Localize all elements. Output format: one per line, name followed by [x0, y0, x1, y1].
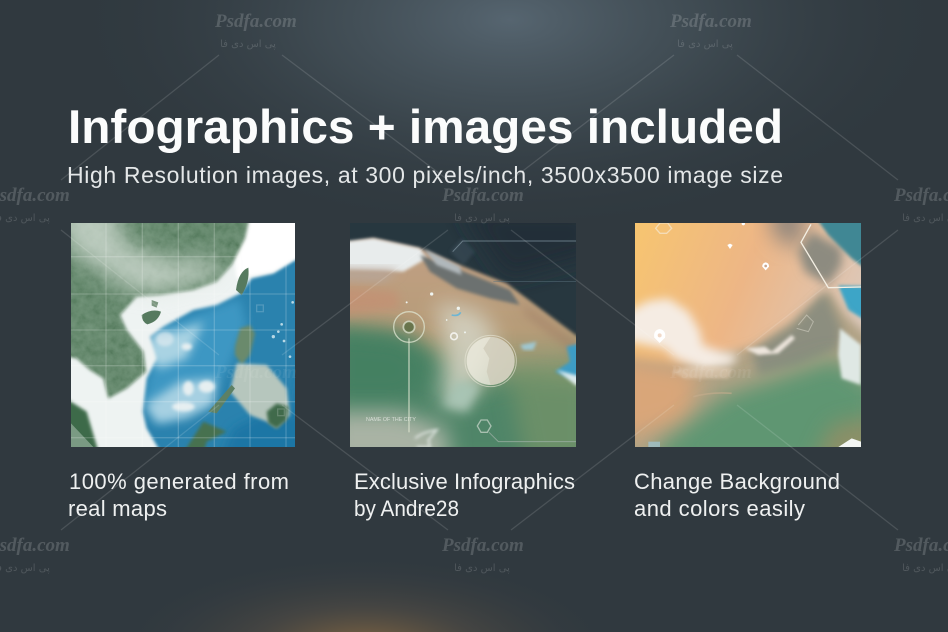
lower land — [635, 290, 861, 447]
hud graphics — [394, 241, 576, 442]
mainland — [71, 223, 251, 400]
cloud — [615, 298, 738, 370]
snow — [330, 238, 427, 272]
caption: exclusive infographics: Exclusive Infographics — [354, 469, 575, 494]
watermarks: Psdfa.com — [441, 535, 524, 556]
coast — [554, 342, 576, 379]
watermarks: Psdfa.com — [214, 362, 297, 383]
title: Infographics + images included — [68, 100, 783, 153]
clouds over sea — [156, 332, 215, 411]
watermarks: Psdfa.com — [669, 11, 752, 32]
watermark persian lines: پی اس دی فا — [677, 39, 733, 50]
panel: exclusive infographics image — [350, 223, 576, 447]
map pins — [654, 222, 769, 343]
globe land — [350, 236, 576, 402]
hud lines — [656, 223, 861, 332]
watermarks: Psdfa.com — [441, 185, 524, 206]
caption: change colors — [634, 469, 840, 521]
mountains — [420, 255, 520, 305]
caption: exclusive infographics: by Andre28 — [354, 496, 459, 521]
watermark persian lines: پی اس دی فا — [220, 39, 276, 50]
caption: real maps — [68, 469, 289, 521]
watermark persian lines: پی اس دی فا — [454, 213, 510, 224]
watermark persian lines: پی اس دی فا — [454, 563, 510, 574]
panel: real maps image — [71, 223, 295, 447]
map grid — [71, 223, 295, 447]
watermarks: Psdfa.com — [214, 11, 297, 32]
mountain ghost texture — [672, 366, 732, 378]
caption: exclusive infographics — [354, 469, 575, 521]
panel: change colors image — [635, 223, 861, 447]
caption: change colors: and colors easily — [634, 496, 805, 521]
shallow white coast — [71, 256, 295, 447]
caption: real maps: 100% generated from — [69, 469, 289, 494]
subtitle: High Resolution images, at 300 pixels/inch, 3500x3500 image size — [67, 162, 783, 188]
caption: real maps: real maps — [68, 496, 167, 521]
hud panel — [452, 240, 474, 264]
islands — [142, 311, 161, 324]
caption: change colors: Change Background — [634, 469, 840, 494]
watermarks: Psdfa.com — [669, 362, 752, 383]
watermark lattice lines — [61, 55, 898, 530]
haze — [437, 302, 497, 408]
small map caption: NAME OF THE CITY — [366, 417, 416, 423]
